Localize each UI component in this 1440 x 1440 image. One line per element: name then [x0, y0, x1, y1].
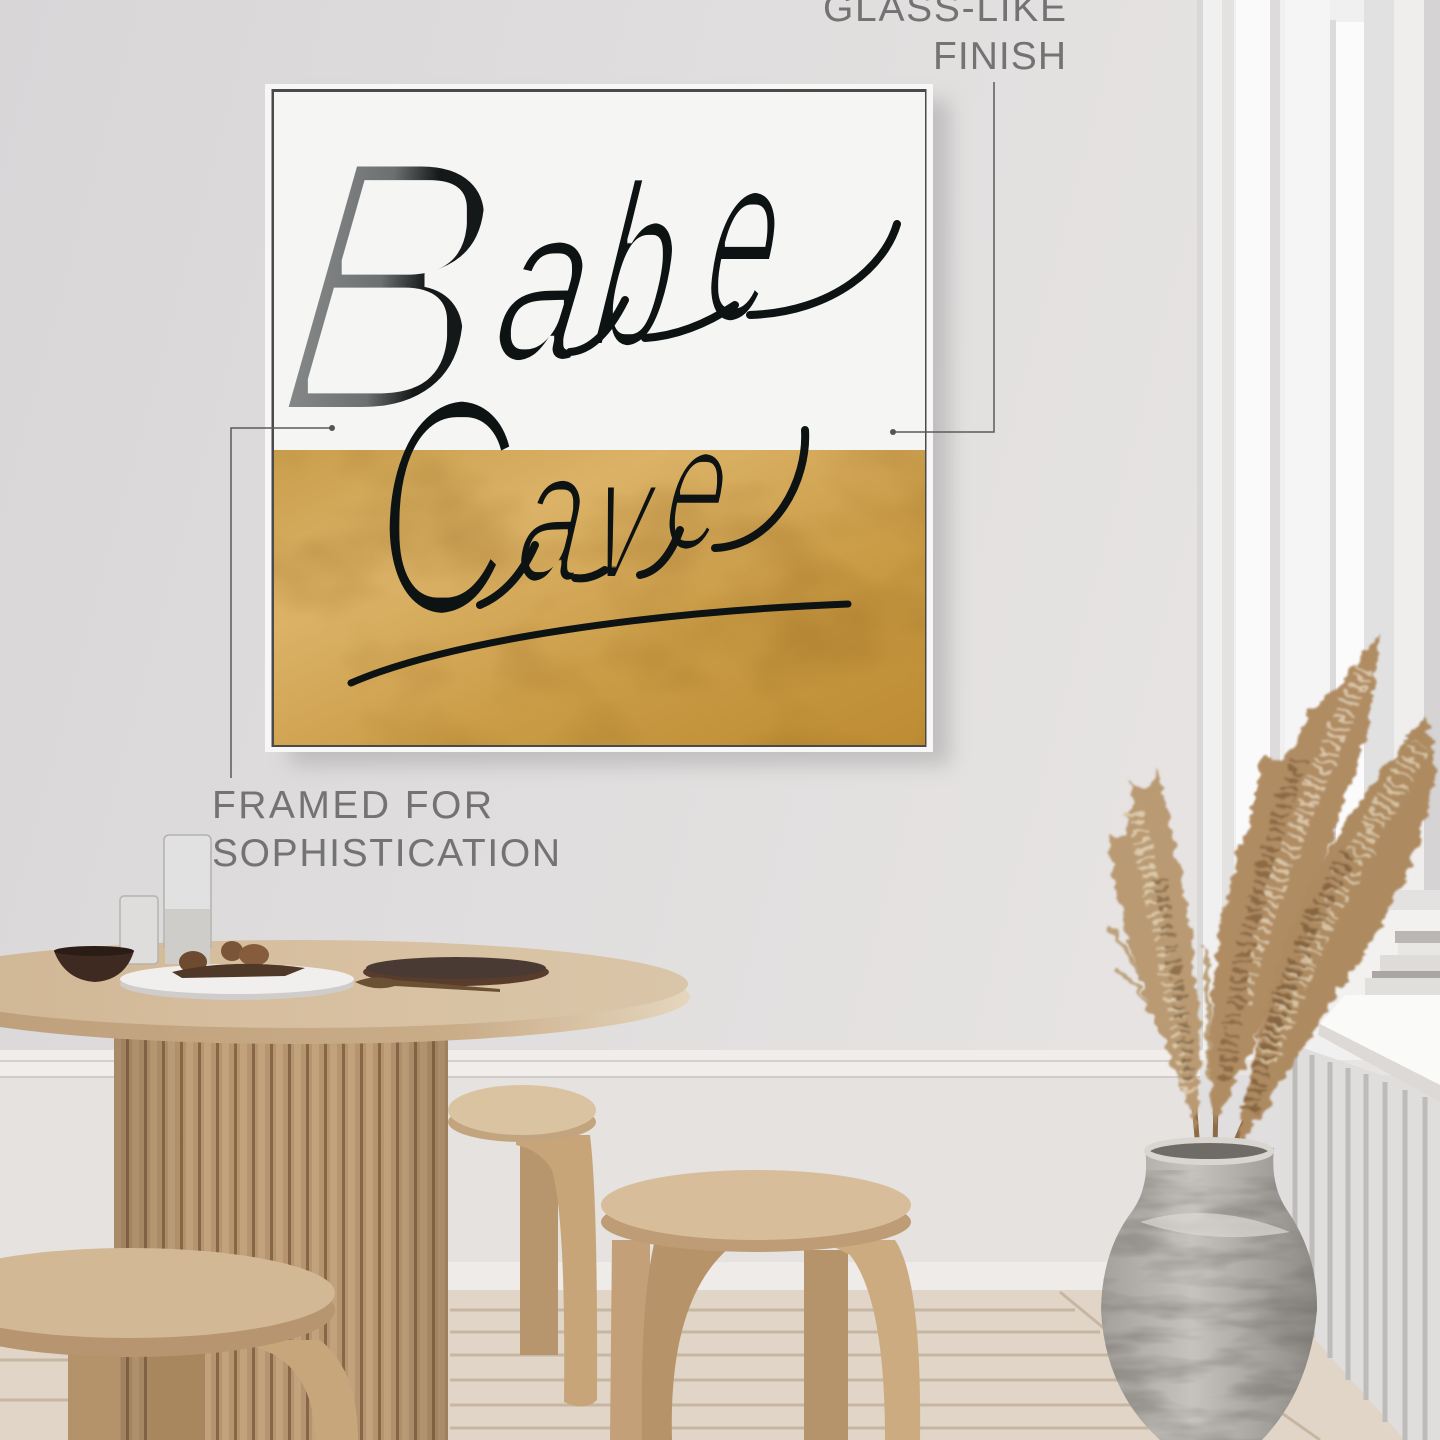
callout: framed for sophistication: SOPHISTICATION [212, 832, 560, 875]
pampas grass [1108, 634, 1434, 1150]
wall background [0, 0, 1440, 1075]
script text: Cave [375, 334, 741, 680]
script text: Cave: v [586, 420, 667, 615]
glass carafe [164, 835, 211, 964]
script text: Babe: b [584, 138, 693, 394]
artwork shadow [290, 100, 950, 765]
stems [1194, 1100, 1245, 1150]
script joins and tail of Babe [570, 224, 897, 352]
marble plate with nuts [120, 941, 354, 1000]
plume left [1108, 766, 1200, 1130]
wisps [1112, 755, 1265, 1090]
underline stroke [351, 604, 848, 683]
plume tall [1210, 634, 1377, 1125]
dark bowl [54, 946, 134, 982]
canvas white half [274, 92, 925, 450]
white frame [265, 84, 933, 752]
script joins and tail of Cave [480, 430, 805, 605]
round table top [0, 940, 690, 1044]
table pedestal [114, 1030, 448, 1440]
spoon [355, 977, 500, 992]
drinking glass [120, 896, 158, 964]
callout: framed for sophistication: FRAMED FOR [212, 784, 492, 827]
lower wall panel [0, 1050, 1200, 1290]
back stool [448, 1085, 597, 1407]
callout: glass-like finish: FINISH [933, 35, 1066, 78]
front stool [601, 1170, 920, 1440]
callout: glass-like finish [823, 0, 1066, 435]
script text: Cave: C [375, 334, 516, 680]
script text: Babe: a [483, 161, 609, 408]
wooden floor [0, 1290, 1440, 1440]
dark wooden plate [363, 957, 549, 986]
ceramic vase [1095, 1140, 1320, 1440]
framed artwork [259, 80, 950, 765]
script text: Babe: B [259, 80, 518, 493]
script text: Cave: e [655, 386, 741, 588]
callout: framed for sophistication [212, 425, 560, 875]
books on window sill [1365, 931, 1440, 995]
front left stool [0, 1248, 358, 1440]
window with white mouldings [1197, 0, 1440, 1060]
script text: Babe [259, 80, 798, 493]
radiator [1280, 1040, 1440, 1440]
window sill [1318, 995, 1440, 1102]
gold leaf half [274, 450, 925, 745]
script text: Cave: a [510, 409, 598, 622]
plume right [1236, 716, 1434, 1145]
script text: Babe: e [693, 103, 798, 371]
